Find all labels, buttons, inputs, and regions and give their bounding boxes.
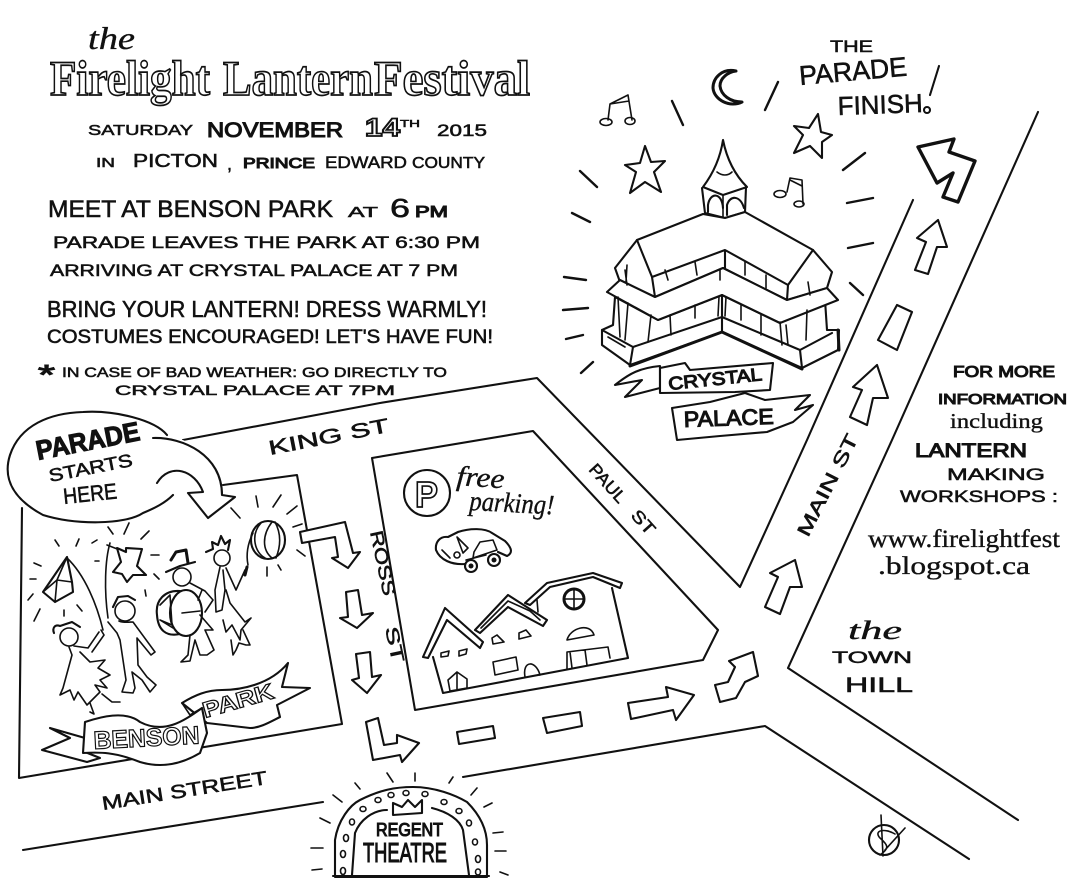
icon: pyramid lantern <box>28 539 103 630</box>
lower roof tier <box>607 268 838 323</box>
crystal palace illustration <box>602 140 839 369</box>
callout text: PARADE <box>33 416 142 466</box>
callout text: HERE <box>62 478 118 509</box>
bad weather note: CRYSTAL PALACE AT 7PM <box>115 382 395 398</box>
theatre name: THEATRE <box>363 837 447 868</box>
benson banner <box>42 703 207 765</box>
title: Firelight Lantern Festival <box>50 50 530 106</box>
costumes line: COSTUMES ENCOURAGED! LET'S HAVE FUN! <box>47 327 493 348</box>
the town hill label: TOWN <box>832 648 912 667</box>
title: Firelight Lantern Festival: Firelight <box>50 50 210 106</box>
label: paul st: ST <box>627 506 659 539</box>
event details text <box>38 193 493 398</box>
location line: PICTON <box>133 151 218 171</box>
free parking text: parking! <box>467 486 555 521</box>
palace sparkle rays <box>563 82 873 373</box>
callout text <box>33 416 142 509</box>
meet line: AT <box>348 204 378 221</box>
icon: hanging star lantern <box>113 548 146 582</box>
the town hill label: the <box>848 616 902 645</box>
parking block <box>372 431 718 710</box>
banner label: park: PARK <box>199 679 277 723</box>
website link text <box>868 526 1060 580</box>
label: ross st <box>366 529 408 664</box>
theatre name <box>363 820 447 868</box>
date line <box>88 114 487 142</box>
parade figures <box>28 495 305 714</box>
location line: COUNTY <box>412 155 485 172</box>
more information text: FOR MORE <box>953 364 1055 381</box>
label: ross st: ST <box>381 625 408 664</box>
website link text: .blogspot.ca <box>878 553 1030 580</box>
roof <box>615 212 832 300</box>
bad weather note <box>38 359 447 398</box>
icon: compass mark <box>869 815 905 856</box>
the parade finish label: FINISH <box>837 88 923 121</box>
date line: SATURDAY <box>88 122 193 139</box>
icon: star left <box>625 146 665 193</box>
date line: 14 <box>365 114 400 142</box>
location line: , <box>227 154 232 174</box>
icon: crowned figure with balloon <box>206 495 305 655</box>
title: Firelight Lantern Festival: Festival <box>374 50 530 106</box>
arch <box>335 787 487 877</box>
more information text: LANTERN <box>915 441 1027 462</box>
date line: TH <box>400 119 420 130</box>
label: main street: MAIN STREET <box>100 768 269 815</box>
label: king st: KING ST <box>267 415 391 460</box>
theatre rays <box>311 773 508 875</box>
icon: moon <box>713 70 742 104</box>
icon: building <box>423 573 628 693</box>
arriving line: ARRIVING AT CRYSTAL PALACE AT 7 PM <box>50 261 458 280</box>
banner label: crystal: CRYSTAL <box>667 364 763 394</box>
the parade finish label <box>798 37 939 121</box>
park banner <box>182 663 310 728</box>
meet line: PM <box>415 204 448 221</box>
callout text: STARTS <box>47 450 134 486</box>
icon: star right <box>794 114 832 158</box>
free parking area <box>404 461 628 693</box>
date line: NOVEMBER <box>207 119 343 142</box>
bad weather note: IN CASE OF BAD WEATHER: GO DIRECTLY TO <box>62 364 447 380</box>
more information text <box>868 364 1067 580</box>
location line: PRINCE <box>243 155 315 172</box>
location line: IN <box>96 155 115 170</box>
the parade finish label: THE <box>830 37 873 56</box>
more information text: MAKING <box>947 465 1045 484</box>
free parking text: free <box>456 461 506 495</box>
icon: music note left <box>608 95 632 120</box>
title: Firelight Lantern Festival: Lantern <box>223 50 373 106</box>
label: paul st <box>585 460 659 539</box>
location line: EDWARD <box>325 153 407 172</box>
banner label: palace: PALACE <box>683 404 774 432</box>
icon: parking sign <box>404 470 450 516</box>
benson park block <box>19 475 342 778</box>
parade route arrows <box>300 139 975 762</box>
the town hill label <box>832 616 913 697</box>
theatre name: REGENT <box>376 820 443 840</box>
bring your lantern line: BRING YOUR LANTERN! DRESS WARMLY! <box>47 296 487 322</box>
icon: music note left heads <box>600 118 635 126</box>
meet line: MEET AT BENSON PARK <box>48 196 333 223</box>
label: main st: MAIN ST <box>794 430 864 540</box>
crown icon <box>393 800 422 815</box>
icon: music note right <box>774 178 804 207</box>
regent theatre illustration <box>311 773 508 877</box>
icon: drummer figure <box>157 550 214 662</box>
the parade finish label: PARADE <box>798 52 908 91</box>
bad weather note: * <box>38 359 55 390</box>
street map lines <box>19 112 1038 859</box>
title: the: the <box>88 20 135 56</box>
parade leaves line: PARADE LEAVES THE PARK AT 6:30 PM <box>53 233 480 252</box>
banner label: benson: BENSON <box>93 721 200 755</box>
website link text: www.firelightfest <box>868 526 1060 553</box>
lower wall and base <box>602 295 839 368</box>
label: paul st: PAUL <box>585 460 630 507</box>
crystal palace banner <box>615 363 813 440</box>
icon: parking sign: P <box>415 474 438 515</box>
the town hill label: HILL <box>845 674 913 697</box>
meet line <box>48 193 448 223</box>
free parking text <box>456 461 555 521</box>
parade starts here callout <box>8 412 235 522</box>
finish arrow <box>918 139 975 202</box>
meet line: 6 <box>390 193 410 223</box>
date line: 2015 <box>437 121 487 140</box>
icon: car <box>436 529 511 572</box>
icon: figure with cap holding star <box>106 523 159 693</box>
street labels <box>100 415 864 815</box>
more information text: INFORMATION <box>938 391 1067 408</box>
more information text: WORKSHOPS : <box>900 487 1058 506</box>
icon: spire <box>702 140 747 246</box>
title block <box>50 20 530 174</box>
more information text: including <box>950 409 1044 433</box>
label: ross st: ROSS <box>366 529 399 597</box>
marquee bulbs <box>340 790 480 875</box>
location line <box>96 151 485 174</box>
icon: figure with hat and dress <box>53 622 120 714</box>
